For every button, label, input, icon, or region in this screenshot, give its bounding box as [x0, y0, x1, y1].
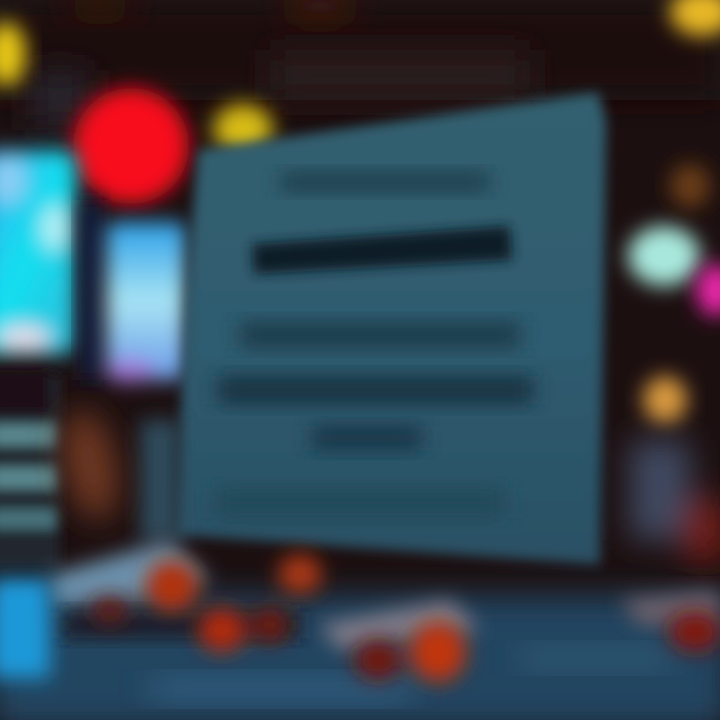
screen: left cyan	[0, 150, 76, 355]
dark divider between screens	[80, 200, 102, 380]
table surface	[0, 540, 720, 720]
food: red pieces	[90, 554, 720, 682]
card left shadow	[140, 420, 180, 540]
person: striped shirt	[0, 370, 60, 570]
light: top-right yellow	[670, 0, 720, 36]
cyan block bottom-left	[0, 578, 50, 678]
light: dim orange	[670, 164, 710, 208]
text line: body 3	[312, 426, 422, 450]
card	[140, 92, 606, 565]
light: top-left yellow	[0, 22, 26, 86]
light: pale mint	[628, 226, 700, 286]
screen: second	[106, 222, 186, 382]
light: magenta	[696, 264, 720, 316]
text line: top	[280, 172, 490, 192]
light: orange	[643, 376, 687, 424]
text line: bold heading	[252, 226, 512, 274]
text line: footer	[215, 488, 505, 518]
text line: body 2	[218, 376, 533, 404]
person: arm	[53, 405, 127, 525]
light: yellow ball	[213, 104, 273, 154]
text line: body 1	[240, 322, 520, 348]
light: red blob	[73, 88, 189, 204]
right background crowd	[630, 440, 720, 566]
